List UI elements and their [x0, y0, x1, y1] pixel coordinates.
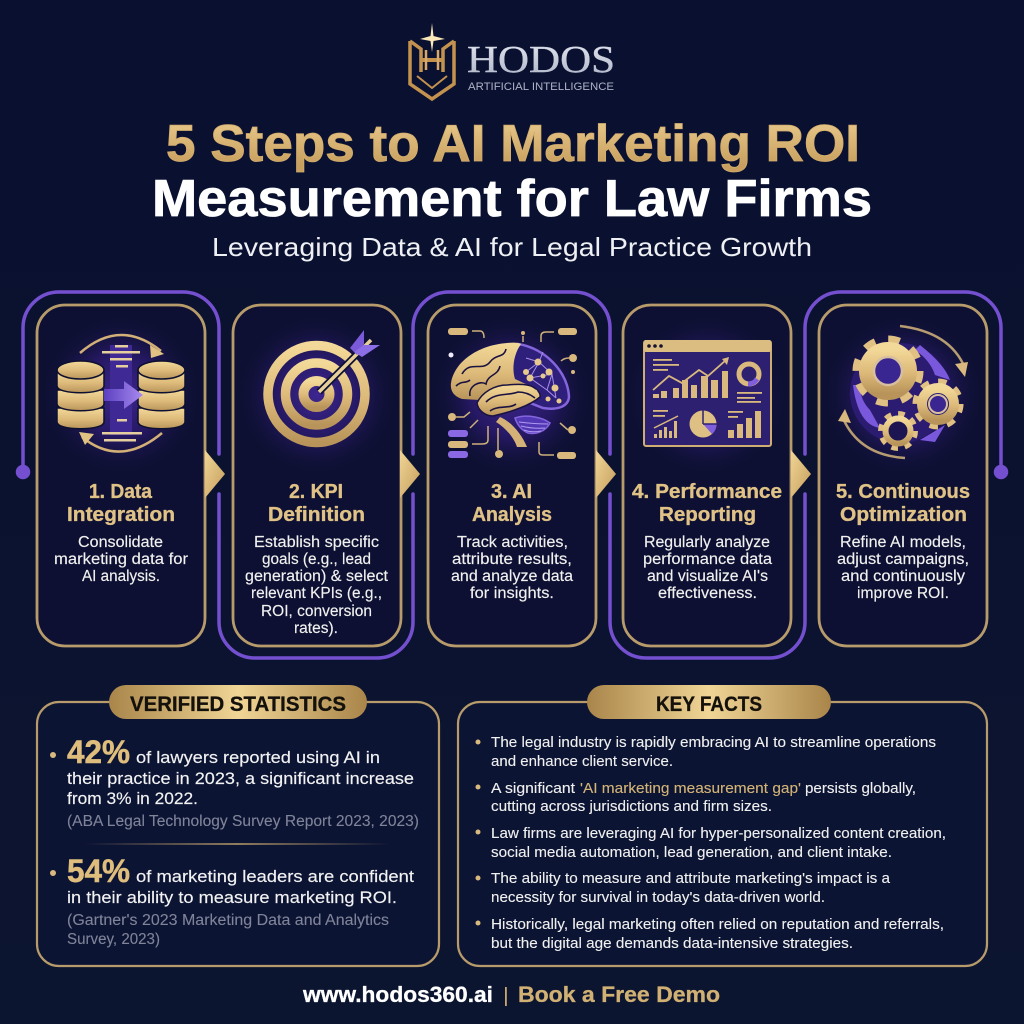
- arrow: step 3 to 4: [596, 450, 616, 498]
- step heading: [836, 481, 970, 526]
- icon: shield logo: [410, 23, 454, 99]
- step description: AI analysis.: [82, 568, 160, 585]
- footer call to action: Book a Free Demo: [518, 982, 720, 1007]
- heading pill: verified statistics: VERIFIED STATISTICS: [130, 693, 346, 716]
- title: 5 Steps to AI Marketing ROI: [166, 115, 860, 173]
- statistic: 54%: of marketing leaders are confident: [136, 868, 414, 886]
- logo wordmark: HODOS: [467, 39, 615, 81]
- step heading: Reporting: [659, 504, 756, 526]
- step heading: [268, 481, 365, 526]
- step description: performance data: [643, 551, 772, 568]
- icon: target: [268, 330, 380, 442]
- step description: Refine AI models,: [840, 534, 966, 551]
- fact 4: necessity for survival in today's data-driven world.: [491, 889, 825, 906]
- step description: [451, 534, 573, 602]
- step description: [54, 534, 188, 585]
- step description: goals (e.g., lead: [262, 551, 371, 568]
- step description: and visualize AI's: [647, 568, 768, 585]
- step heading: Integration: [67, 504, 175, 526]
- step description: marketing data for: [54, 551, 188, 568]
- step heading: [67, 481, 175, 526]
- step description: Consolidate: [78, 534, 163, 551]
- panel: step 2 KPI definition: [233, 305, 401, 646]
- step description: Regularly analyze: [644, 534, 770, 551]
- step description: relevant KPIs (e.g.,: [251, 585, 382, 602]
- statistic: 54%: [50, 853, 414, 948]
- statistic: 42%: 42%: [67, 734, 130, 770]
- step description: Track activities,: [457, 534, 568, 551]
- fact 2: A significant: [491, 780, 576, 797]
- step heading: [632, 481, 782, 526]
- step description: ROI, conversion: [261, 603, 372, 620]
- step description: attribute results,: [452, 551, 572, 568]
- fact 1: and enhance client service.: [491, 753, 673, 770]
- fact 4: The ability to measure and attribute marketing's impact is a: [491, 870, 891, 887]
- step description: improve ROI.: [857, 585, 949, 602]
- heading pill: verified statistics: [109, 685, 367, 719]
- fact 2: cutting across jurisdictions and firm sizes.: [491, 798, 772, 815]
- panel: step 5 continuous optimization: [819, 305, 987, 646]
- fact 1: The legal industry is rapidly embracing AI to streamline operations: [491, 734, 936, 751]
- step heading: 2. KPI: [289, 481, 343, 503]
- step description: [837, 534, 969, 602]
- statistic: 54%: 54%: [67, 853, 130, 889]
- statistic: 54%: in their ability to measure marketing ROI.: [67, 889, 397, 907]
- panel: step 3 AI analysis: [428, 305, 596, 646]
- fact 3: [476, 825, 946, 861]
- footer call to action: www.hodos360.ai: [302, 982, 493, 1007]
- step description: for insights.: [470, 585, 554, 602]
- fact 2: persists globally,: [805, 780, 916, 797]
- heading pill: key facts: KEY FACTS: [656, 693, 762, 716]
- step heading: Optimization: [840, 504, 967, 526]
- icon: brain: [448, 328, 577, 459]
- step heading: Analysis: [472, 504, 552, 526]
- fact 3: Law firms are leveraging AI for hyper-personalized content creation,: [491, 825, 946, 842]
- step description: rates).: [294, 620, 338, 637]
- panel: key facts: [458, 685, 987, 966]
- step description: generation) & select: [245, 568, 389, 585]
- statistic: 42%: (ABA Legal Technology Survey Report 2023, 2023): [67, 813, 419, 830]
- arrow: step 2 to 3: [400, 450, 420, 498]
- step description: and continuously: [841, 568, 965, 585]
- step heading: 4. Performance: [632, 481, 782, 503]
- process connector line: [18, 292, 1006, 658]
- logo: [410, 23, 615, 99]
- statistic: 42%: [50, 734, 419, 830]
- fact 5: Historically, legal marketing often relied on reputation and referrals,: [491, 916, 944, 933]
- heading pill: key facts: [587, 685, 831, 719]
- statistic: 42%: from 3% in 2022.: [67, 790, 198, 808]
- icon: databases: [57, 335, 185, 452]
- title: [152, 115, 872, 228]
- panel: step 4 performance reporting: [623, 305, 791, 646]
- fact 3: social media automation, lead generation, and client intake.: [491, 844, 892, 861]
- step heading: [472, 481, 552, 526]
- fact 5: [476, 916, 944, 952]
- arrow: step 1 to 2: [205, 450, 225, 498]
- fact 2: 'AI marketing measurement gap': [580, 780, 801, 797]
- step description: and analyze data: [451, 568, 573, 585]
- step description: [643, 534, 772, 602]
- step description: [245, 534, 389, 637]
- circuit connectors: [448, 328, 577, 459]
- step heading: 1. Data: [89, 481, 153, 503]
- fact 4: [476, 870, 891, 906]
- fact 5: but the digital age demands data-intensive strategies.: [491, 935, 853, 952]
- step description: effectiveness.: [658, 585, 757, 602]
- step description: adjust campaigns,: [837, 551, 969, 568]
- panel: verified statistics: [37, 685, 439, 966]
- icon: dashboard: [644, 340, 771, 446]
- arrow: step 4 to 5: [791, 450, 811, 498]
- logo tagline: ARTIFICIAL INTELLIGENCE: [468, 81, 614, 93]
- fact 2: [476, 780, 916, 815]
- statistic: 42%: of lawyers reported using AI in: [136, 749, 380, 767]
- footer call to action: [302, 982, 720, 1007]
- fact 1: [476, 734, 936, 770]
- icon: gears: [838, 326, 968, 458]
- statistic: 54%: Survey, 2023): [67, 931, 160, 948]
- statistic: 42%: their practice in 2023, a significant increase: [67, 770, 414, 788]
- panel: step 1 data integration: [37, 305, 205, 646]
- subtitle: Leveraging Data & AI for Legal Practice Growth: [212, 232, 812, 262]
- statistic: 54%: (Gartner's 2023 Marketing Data and Analytics: [67, 912, 389, 929]
- title: Measurement for Law Firms: [152, 170, 872, 228]
- step heading: Definition: [268, 504, 365, 526]
- step heading: 5. Continuous: [836, 481, 970, 503]
- step description: Establish specific: [254, 534, 379, 551]
- step heading: 3. AI: [491, 481, 532, 503]
